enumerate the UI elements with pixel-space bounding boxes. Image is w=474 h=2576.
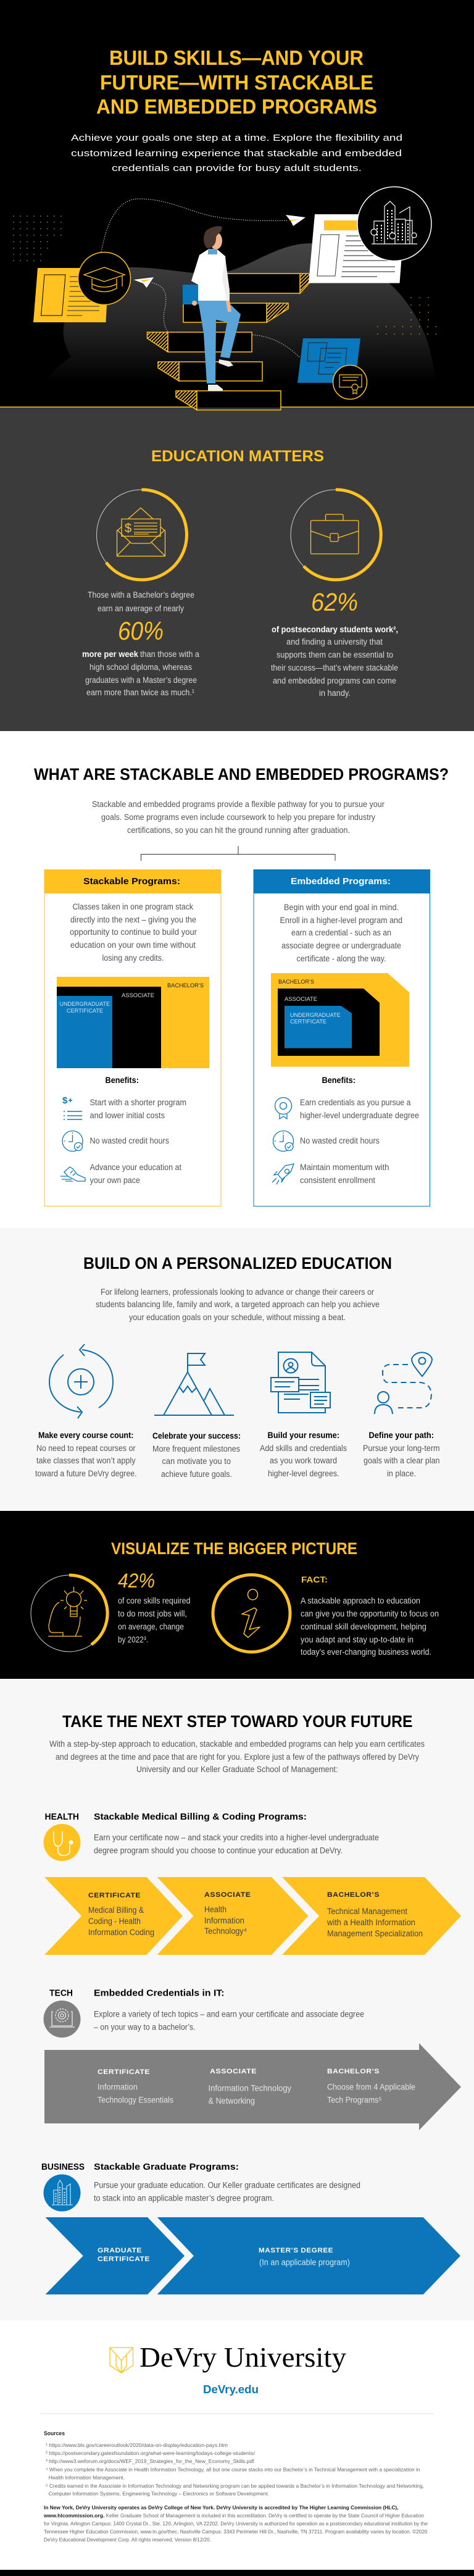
chevron: graduate certificate: CERTIFICATE bbox=[98, 2256, 150, 2263]
stat text: bachelor's earnings: high school diploma, whereas bbox=[89, 663, 192, 672]
benefit text: your own pace bbox=[90, 1176, 140, 1185]
sources: ¹ https://www.bls.gov/careeroutlook/2020/data-on-display/education-pays.htm bbox=[46, 2442, 228, 2448]
pathway: business bbox=[41, 2162, 460, 2294]
sources: ³ http://www3.weforum.org/docs/WEF_2019_Strategies_for_the_New_Economy_Skills.pdf bbox=[46, 2458, 254, 2464]
benefit text: No wasted credit hours bbox=[300, 1136, 380, 1145]
heading: TAKE THE NEXT STEP TOWARD YOUR FUTURE bbox=[62, 1712, 412, 1731]
heading: BUILD ON A PERSONALIZED EDUCATION bbox=[83, 1254, 392, 1273]
bracket connector bbox=[141, 846, 335, 861]
diagram: nested credentials bbox=[271, 973, 409, 1067]
icon: path with pin bbox=[375, 1352, 432, 1414]
chevron: bachelor's: Management Specialization bbox=[327, 1929, 423, 1938]
description: Begin with your end goal in mind. bbox=[284, 903, 399, 912]
sources bbox=[44, 2430, 424, 2497]
icon: info circle bbox=[213, 1574, 290, 1652]
pathway: health: Stackable Medical Billing & Coding Programs: bbox=[94, 1812, 307, 1822]
intro text: For lifelong learners, professionals looking to advance or change their careers or bbox=[101, 1287, 374, 1297]
benefits heading: Benefits: bbox=[105, 1076, 139, 1085]
icon: laptop with gear bbox=[43, 2001, 80, 2038]
figure: student bbox=[183, 226, 241, 391]
arrow: tech credentials: Information bbox=[98, 2082, 138, 2092]
benefit text bbox=[90, 1163, 181, 1185]
sources: ⁴ When you complete the Associate in Health Information Technology, all but one course stacks into our Bachelor’s in Technical Management with a specialization in bbox=[46, 2466, 420, 2472]
accreditation statement: In New York, DeVry University operates as DeVry College of New York. DeVry University is accredited by The Higher Learning Commission (HLC), bbox=[44, 2504, 399, 2511]
pathway: tech: Explore a variety of tech topics – and earn your certificate and associate degree bbox=[94, 2009, 364, 2019]
chevron: graduate certificate bbox=[46, 2217, 185, 2294]
column: build your resume: as you work toward bbox=[270, 1456, 337, 1465]
title: AND EMBEDDED PROGRAMS bbox=[96, 95, 377, 118]
icon: clock bbox=[62, 1131, 83, 1151]
chevron: master's degree: (In an applicable program) bbox=[259, 2257, 350, 2267]
title: BUILD SKILLS—AND YOUR bbox=[109, 46, 364, 69]
chevron: bachelor's: BACHELOR’S bbox=[327, 1891, 380, 1899]
pathway: tech bbox=[43, 1988, 461, 2130]
arrow: tech credentials: Technology Essentials bbox=[98, 2096, 173, 2104]
stat text: bachelor's earnings: Those with a Bachelor’s degree bbox=[88, 590, 194, 600]
chevron: associate: Technology⁴ bbox=[204, 1926, 247, 1936]
chevron: bachelor's: with a Health Information bbox=[326, 1918, 415, 1927]
benefit text bbox=[300, 1098, 419, 1120]
column: define your path: in place. bbox=[387, 1469, 416, 1478]
description: Enroll in a higher-level program and bbox=[280, 916, 402, 925]
heading: WHAT ARE STACKABLE AND EMBEDDED PROGRAMS? bbox=[34, 765, 449, 784]
stat text: bachelor's earnings bbox=[82, 590, 199, 697]
accreditation statement: Keller Graduate School of Management is included in this accreditation. DeVry is certified to operate by the State Council of Higher Education bbox=[106, 2512, 424, 2519]
diagram: nested credentials: ASSOCIATE bbox=[285, 996, 317, 1003]
icon: head with light bulb bbox=[48, 1587, 87, 1636]
column: celebrate your success: achieve future goals. bbox=[161, 1470, 232, 1479]
benefit text: consistent enrollment bbox=[300, 1176, 375, 1185]
stat text: students who work: and finding a university that bbox=[286, 637, 383, 646]
dots bbox=[14, 216, 437, 334]
chevron: associate: Health bbox=[204, 1905, 227, 1914]
pathway: health: HEALTH bbox=[44, 1812, 79, 1822]
stat text: students who work: their success—that’s where stackable bbox=[271, 663, 398, 672]
website: DeVry.edu bbox=[203, 2383, 259, 2396]
diagram: stacked credentials: CERTIFICATE bbox=[67, 1008, 103, 1014]
intro text: your education goals on your schedule, without missing a beat. bbox=[129, 1313, 346, 1322]
intro text: With a step-by-step approach to education, stackable and embedded programs can help you earn certificates bbox=[49, 1739, 425, 1749]
icon: graduation cap bbox=[78, 252, 131, 305]
diagram: nested credentials: BACHELOR’S bbox=[278, 979, 314, 985]
icon: briefcase bbox=[311, 514, 359, 554]
arrow: tech credentials: Choose from 4 Applicable bbox=[327, 2082, 415, 2092]
sources: ⁵ Credits earned in the Associate in Information Technology and Networking program can be applied towards a Bachelor’s in Information Technology and Networking, bbox=[46, 2483, 424, 2489]
diagram: nested credentials: CERTIFICATE bbox=[290, 1019, 326, 1025]
accreditation statement: for Virginia. Arlington Campus: 1400 Crystal Dr., Ste. 120, Arlington, VA 22202. DeVry University is authorized for operation as a postsecondary educational institution by the bbox=[44, 2520, 428, 2527]
panel: embedded programs bbox=[253, 869, 430, 1206]
intro text: students balancing life, family and work, a targeted approach can help you achieve bbox=[96, 1300, 380, 1309]
stat text: core skills bbox=[118, 1570, 190, 1644]
panel: embedded programs: Embedded Programs: bbox=[291, 876, 391, 887]
ground line bbox=[0, 406, 474, 408]
panel: education matters bbox=[0, 408, 474, 731]
paper plane: lower bbox=[133, 277, 154, 288]
donut: 60% bbox=[96, 490, 186, 580]
intro text: customized learning experience that stackable and embedded bbox=[71, 148, 402, 159]
stat text: core skills: 42% bbox=[118, 1570, 155, 1592]
pathway: health: degree program should you choose to continue your education at DeVry. bbox=[94, 1846, 343, 1855]
description bbox=[70, 902, 197, 963]
icon: stethoscope bbox=[43, 1824, 80, 1861]
chevron: associate: ASSOCIATE bbox=[204, 1891, 251, 1899]
icon: clock bbox=[273, 1131, 294, 1151]
column: define your path: Define your path: bbox=[369, 1431, 434, 1440]
accreditation statement: www.hlcommission.org. bbox=[43, 2512, 104, 2519]
arrow: tech credentials: & Networking bbox=[209, 2096, 255, 2106]
pathway: business: BUSINESS bbox=[41, 2162, 85, 2172]
stat text: bachelor's earnings: 60% bbox=[118, 616, 164, 645]
intro text: University and our Keller Graduate School of Management: bbox=[136, 1765, 338, 1774]
benefit text: Start with a shorter program bbox=[90, 1098, 186, 1107]
panel: build on a personalized education bbox=[0, 1228, 474, 1511]
column: celebrate your success: Celebrate your success: bbox=[152, 1431, 241, 1441]
intro text: goals. Some programs even include coursework to help you prepare for industry bbox=[101, 813, 375, 822]
column: build your resume: Add skills and credentials bbox=[260, 1444, 347, 1453]
arrow: tech credentials: CERTIFICATE bbox=[98, 2068, 150, 2076]
intro text bbox=[96, 1287, 380, 1322]
column: build your resume: higher-level degrees. bbox=[268, 1469, 339, 1478]
chevron: master's degree: MASTER’S DEGREE bbox=[259, 2247, 333, 2254]
stat text: students who work: 62% bbox=[311, 588, 358, 616]
column: make every course count bbox=[35, 1431, 137, 1478]
intro text: Stackable and embedded programs provide a flexible pathway for you to pursue your bbox=[92, 800, 385, 809]
title: FUTURE—WITH STACKABLE bbox=[100, 71, 373, 94]
bottom bar bbox=[0, 2570, 474, 2576]
stat text: core skills: by 2022³. bbox=[118, 1635, 148, 1644]
intro text bbox=[71, 133, 402, 174]
document: white bbox=[309, 214, 405, 283]
intro text bbox=[92, 800, 385, 835]
description: losing any credits. bbox=[102, 953, 164, 963]
fact text: A stackable approach to education bbox=[301, 1596, 420, 1605]
pathway: business: to stack into an applicable master’s degree program. bbox=[94, 2193, 274, 2203]
panel: what are stackable and embedded programs bbox=[0, 731, 474, 1228]
icon: medal bbox=[275, 1098, 291, 1119]
background hill bbox=[45, 243, 435, 407]
fact text: FACT: bbox=[301, 1574, 328, 1584]
description bbox=[280, 903, 402, 963]
intro text: credentials can provide for busy adult students. bbox=[112, 163, 362, 174]
intro text: Achieve your goals one step at a time. Explore the flexibility and bbox=[71, 133, 402, 143]
accreditation statement: DeVry Educational Development Corp. All rights reserved. Version 8/12/20. bbox=[44, 2536, 211, 2543]
arrow: tech credentials bbox=[44, 2043, 461, 2130]
document: yellow bbox=[33, 268, 109, 322]
sources: Sources bbox=[44, 2430, 65, 2437]
diagram: stacked credentials: UNDERGRADUATE bbox=[59, 1001, 110, 1008]
description: directly into the next – giving you the bbox=[70, 915, 196, 924]
document: blue bbox=[297, 338, 360, 383]
benefit text: higher-level undergraduate degree bbox=[300, 1111, 419, 1120]
logo: DeVry University: DeVry University bbox=[139, 2341, 346, 2373]
stat text: students who work: of postsecondary students work², bbox=[272, 625, 398, 634]
stat text: students who work: in handy. bbox=[319, 688, 351, 698]
description: education on your own time without bbox=[70, 940, 196, 950]
column: define your path: goals with a clear plan bbox=[364, 1456, 439, 1465]
pathway: tech: Embedded Credentials in IT: bbox=[94, 1988, 225, 1998]
panel: take the next step bbox=[0, 1679, 474, 2320]
pathway: business: Stackable Graduate Programs: bbox=[94, 2162, 239, 2172]
benefit text bbox=[300, 1163, 389, 1185]
stat text: bachelor's earnings: earn an average of nearly bbox=[98, 604, 184, 613]
panel: visualize the bigger picture bbox=[0, 1511, 474, 1679]
description: opportunity to continue to build your bbox=[70, 927, 197, 937]
fact text: can give you the opportunity to focus on bbox=[301, 1609, 439, 1618]
pathway: health bbox=[43, 1812, 461, 1955]
fact text: today’s ever-changing business world. bbox=[301, 1647, 431, 1657]
fact text: you adapt and stay up-to-date in bbox=[301, 1635, 414, 1644]
description: earn a credential - such as an bbox=[291, 928, 391, 937]
benefit text: Maintain momentum with bbox=[300, 1163, 389, 1172]
pathway: health: Earn your certificate now – and stack your credits into a higher-level undergraduate bbox=[94, 1833, 379, 1842]
pathway: tech: – on your way to a bachelor’s. bbox=[94, 2023, 195, 2031]
icon: buildings bbox=[43, 2175, 80, 2212]
column: make every course count: Make every course count: bbox=[38, 1431, 133, 1440]
pathway: business: Pursue your graduate education. Our Keller graduate certificates are designed bbox=[94, 2181, 360, 2189]
chevron: associate: Information bbox=[204, 1916, 244, 1925]
stat text: core skills: of core skills required bbox=[118, 1596, 190, 1605]
column: celebrate your success bbox=[152, 1431, 241, 1479]
accreditation statement bbox=[43, 2504, 428, 2543]
intro text bbox=[49, 1739, 425, 1774]
column: build your resume: Build your resume: bbox=[268, 1431, 339, 1440]
pathway: tech: TECH bbox=[49, 1988, 73, 1998]
diagram: stacked credentials: ASSOCIATE bbox=[122, 992, 154, 999]
stat text: core skills: to do most jobs will, bbox=[118, 1609, 187, 1618]
column: celebrate your success: can motivate you to bbox=[162, 1457, 231, 1466]
column: make every course count: take classes that won’t apply bbox=[36, 1456, 136, 1465]
icon: rocket bbox=[272, 1164, 294, 1184]
chevron: certificate: Coding - Health bbox=[88, 1917, 141, 1926]
fact text: continual skill development, helping bbox=[301, 1622, 426, 1631]
icon: dollar list bbox=[62, 1095, 82, 1119]
chevron: certificate: Information Coding bbox=[88, 1928, 154, 1937]
arrow: tech credentials: Tech Programs⁵ bbox=[327, 2096, 381, 2104]
column: define your path: Pursue your long-term bbox=[363, 1444, 439, 1453]
sources: Health Information Management. bbox=[49, 2475, 125, 2481]
accreditation statement: Tennessee Higher Education Commission, www.tn.gov/thec. Nashville Campus: 3343 Perimeter Hill Dr., Nashville, TN 37211. Program availability varies by location. ©2020 bbox=[44, 2528, 428, 2535]
chevron: master's degree bbox=[157, 2217, 460, 2294]
arrow: tech credentials: ASSOCIATE bbox=[210, 2068, 257, 2075]
stat text: students who work bbox=[271, 588, 398, 698]
fact text bbox=[301, 1574, 439, 1657]
icon: resume bbox=[271, 1352, 330, 1413]
diagram: nested credentials: UNDERGRADUATE bbox=[290, 1012, 341, 1019]
column: make every course count: toward a future DeVry degree. bbox=[35, 1469, 137, 1478]
intro text: certifications, so you can hit the ground running after graduation. bbox=[127, 826, 350, 835]
benefits heading: Benefits: bbox=[322, 1076, 356, 1085]
benefit text bbox=[90, 1098, 186, 1120]
panel: hero bbox=[0, 0, 474, 410]
benefit text: Earn credentials as you pursue a bbox=[300, 1098, 411, 1107]
donut: 62% bbox=[291, 490, 381, 580]
stat text: bachelor's earnings: more per week bbox=[82, 650, 138, 659]
dotted flight paths bbox=[101, 199, 299, 357]
steps bbox=[147, 274, 318, 410]
benefit text: and lower initial costs bbox=[90, 1111, 165, 1120]
panel: footer bbox=[0, 2320, 474, 2570]
arrow: tech credentials: Information Technology bbox=[209, 2083, 291, 2093]
sources: Computer Information Systems, Engineering Technology – Electronics or Software Development. bbox=[49, 2491, 269, 2497]
stat text: core skills: on average, change bbox=[118, 1622, 184, 1631]
divider bbox=[41, 2413, 433, 2414]
paper plane: top bbox=[286, 215, 306, 226]
column: build your resume bbox=[260, 1431, 347, 1478]
diagram: stacked credentials: BACHELOR’S bbox=[167, 982, 204, 989]
icon: envelope with paycheck bbox=[117, 508, 165, 556]
chevron: graduate certificate: GRADUATE bbox=[98, 2247, 142, 2254]
panel: stackable programs bbox=[44, 869, 221, 1206]
icon: envelope with paycheck: $ bbox=[125, 522, 131, 535]
description: certificate - along the way. bbox=[296, 954, 386, 963]
heading: VISUALIZE THE BIGGER PICTURE bbox=[111, 1539, 357, 1558]
icon: certificate bbox=[333, 366, 367, 399]
diagram: stacked credentials bbox=[57, 977, 209, 1068]
column: make every course count: No need to repeat courses or bbox=[36, 1444, 136, 1453]
stat text: students who work: and embedded programs can come bbox=[273, 676, 396, 685]
title bbox=[96, 46, 377, 118]
column: define your path bbox=[363, 1431, 439, 1478]
stat text: bachelor's earnings: earn more than twice as much.¹ bbox=[86, 688, 194, 697]
description: associate degree or undergraduate bbox=[281, 941, 401, 950]
chevron: bachelor's bbox=[282, 1877, 461, 1955]
chevron: certificate bbox=[44, 1877, 183, 1955]
icon: city bbox=[357, 186, 431, 261]
panel: stackable programs: Stackable Programs: bbox=[83, 876, 180, 887]
chevron: bachelor's: Technical Management bbox=[327, 1907, 407, 1916]
stat text: students who work: supports them can be essential to bbox=[276, 650, 393, 659]
column: celebrate your success: More frequent milestones bbox=[152, 1444, 240, 1453]
stat text: bachelor's earnings: graduates with a Master’s degree bbox=[85, 675, 197, 685]
description: Classes taken in one program stack bbox=[73, 902, 193, 911]
icon: running shoe bbox=[60, 1167, 85, 1181]
benefit text: Advance your education at bbox=[90, 1163, 181, 1172]
chevron: associate bbox=[157, 1877, 309, 1955]
benefit text: No wasted credit hours bbox=[90, 1136, 169, 1145]
stat text: bachelor's earnings: than those with a bbox=[140, 650, 199, 659]
icon: dollar list: $ bbox=[62, 1095, 68, 1106]
intro text: and degrees at the time and pace that are right for you. Explore just a few of the pathways offered by DeVry bbox=[56, 1752, 419, 1762]
chevron: certificate: Medical Billing & bbox=[88, 1905, 144, 1915]
icon: mountain with flag bbox=[154, 1353, 234, 1415]
chevron: certificate: CERTIFICATE bbox=[88, 1892, 141, 1899]
sources: ² https://postsecondary.gatesfoundation.org/what-were-learning/todays-college-students/ bbox=[46, 2450, 256, 2456]
icon: cycle with plus bbox=[49, 1344, 113, 1418]
arrow: tech credentials: BACHELOR’S bbox=[327, 2068, 380, 2075]
donut: 42% bbox=[31, 1575, 107, 1652]
heading: EDUCATION MATTERS bbox=[151, 448, 324, 465]
